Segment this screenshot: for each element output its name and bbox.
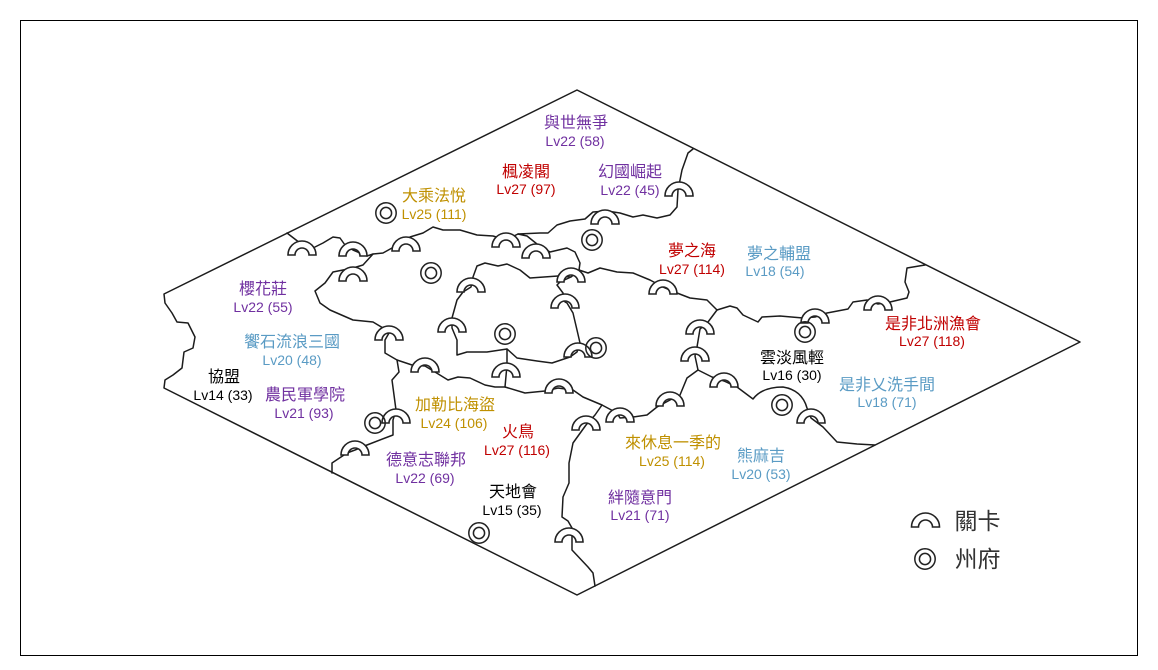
label: 絆隨意門: Lv21 (71) [610,507,670,523]
map outline [164,90,1080,595]
label: 與世無爭: Lv22 (58) [545,133,605,149]
label: 熊麻吉: 熊麻吉 [737,447,785,465]
label: 農民軍學院: Lv21 (93) [274,405,334,421]
label: 饗石流浪三國: 饗石流浪三國 [244,332,340,351]
label: 協盟: 協盟 [208,368,240,386]
label: 是非乂洗手間: 是非乂洗手間 [839,376,935,394]
label: 是非北洲漁會: 是非北洲漁會 [885,315,981,333]
label: 饗石流浪三國 [244,332,340,368]
label: 夢之輔盟: Lv18 (54) [745,263,805,279]
label: 是非北洲漁會 [885,315,981,349]
label: 夢之海 [659,242,725,277]
label: 協盟 [193,368,253,403]
label: 絆隨意門: 絆隨意門 [608,488,672,507]
label: 天地會: Lv15 (35) [482,502,542,518]
label: 熊麻吉: Lv20 (53) [731,466,791,482]
label: 德意志聯邦 [386,450,466,486]
label: 饗石流浪三國: Lv20 (48) [262,352,322,368]
label: 絆隨意門 [608,488,672,523]
label: 雲淡風輕: Lv16 (30) [762,367,822,383]
label: 來休息一季的 [625,434,721,469]
label: 與世無爭: 與世無爭 [544,114,608,132]
territory borders [287,149,925,586]
label: 幻國崛起 [598,163,662,198]
label: 夢之海: 夢之海 [668,242,716,260]
legend text: pass: 關卡 [954,508,1000,534]
label: 火鳥: Lv27 (116) [484,442,550,458]
label: 協盟: Lv14 (33) [193,387,253,403]
label: 大乘法悅 [402,187,466,222]
label: 夢之輔盟: 夢之輔盟 [747,245,811,263]
legend icon: pass [912,513,940,527]
label: 德意志聯邦: Lv22 (69) [395,470,455,486]
label: 夢之海: Lv27 (114) [659,261,725,277]
label: 是非乂洗手間 [839,376,935,410]
label: 夢之輔盟 [745,245,811,279]
label: 櫻花莊: 櫻花莊 [239,279,287,298]
label: 來休息一季的: 來休息一季的 [625,434,721,452]
label: 大乘法悅: 大乘法悅 [402,187,466,205]
label: 幻國崛起: 幻國崛起 [598,163,662,181]
label: 熊麻吉 [731,447,791,482]
label: 加勒比海盜 [415,396,495,431]
label: 櫻花莊: Lv22 (55) [233,299,293,315]
label: 幻國崛起: Lv22 (45) [600,182,660,198]
label: 天地會: 天地會 [489,483,537,501]
label: 是非北洲漁會: Lv27 (118) [899,333,965,349]
legend text: prefecture: 州府 [954,546,1000,572]
label: 與世無爭 [544,114,608,149]
label: 天地會 [482,483,542,518]
passes (arch icons) [288,182,892,542]
label: 楓凌閣: Lv27 (97) [496,181,556,197]
label: 德意志聯邦: 德意志聯邦 [386,450,466,469]
label: 農民軍學院 [265,386,345,421]
label: 雲淡風輕: 雲淡風輕 [760,349,824,367]
legend icon: prefecture [915,549,935,569]
prefectures (ring icons) [365,203,815,543]
label: 火鳥 [484,423,550,458]
legend [912,508,1000,572]
label: 是非乂洗手間: Lv18 (71) [857,394,917,410]
label: 農民軍學院: 農民軍學院 [265,386,345,404]
label: 大乘法悅: Lv25 (111) [402,206,466,222]
label: 櫻花莊 [233,279,293,315]
label: 楓凌閣 [496,163,556,197]
label: 火鳥: 火鳥 [502,423,534,441]
label: 來休息一季的: Lv25 (114) [639,453,705,469]
label: 加勒比海盜: Lv24 (106) [421,415,487,431]
label: 加勒比海盜: 加勒比海盜 [415,396,495,414]
label: 雲淡風輕 [760,349,824,383]
label: 楓凌閣: 楓凌閣 [502,163,550,181]
